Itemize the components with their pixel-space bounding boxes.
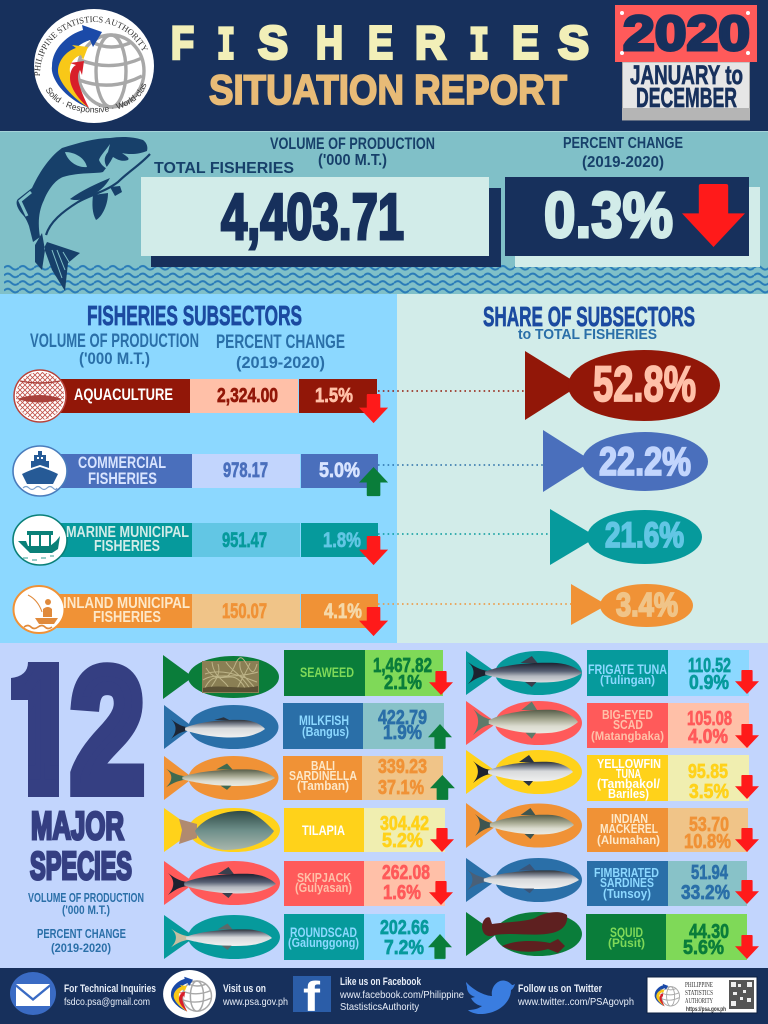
row: aquaculture: 1.5% — [315, 385, 353, 407]
row: inland municipal fisheries: 150.07 — [222, 600, 267, 623]
species: frigate tuna: FRIGATE TUNA — [588, 661, 667, 677]
logo: Philippine Statistics Authority: PHILIPPINE STATISTICS AUTHORITY — [34, 16, 148, 76]
row: commercial fisheries: 5.0% — [319, 459, 360, 482]
contact: twitter: Follow us on Twitter — [518, 983, 603, 995]
row: inland municipal fisheries: INLAND MUNICIPAL — [63, 595, 190, 612]
icon: municipal boat — [13, 515, 67, 565]
badge: PSA with QR code: PHILIPPINE — [685, 980, 713, 989]
legend: volume and percent: ('000 M.T.) — [62, 905, 110, 917]
species: frigate tuna — [466, 650, 759, 696]
fish: marine municipal share — [550, 509, 702, 565]
fish: inland municipal share: 3.4% — [616, 586, 678, 623]
big numeral 12: 2 — [71, 633, 144, 827]
panel: total fisheries — [0, 131, 768, 294]
row: commercial fisheries: 978.17 — [223, 459, 268, 482]
species: skipjack: (Gulyasan) — [295, 880, 352, 895]
percent change card: 0.3% — [544, 179, 673, 251]
icon: facebook: f — [303, 973, 321, 1020]
heading: major species: MAJOR — [31, 805, 124, 848]
waves — [4, 264, 768, 294]
fish: commercial share: 22.2% — [599, 440, 691, 484]
row: commercial fisheries: COMMERCIAL — [78, 453, 166, 472]
badge: PSA with QR code: AUTHORITY — [685, 996, 713, 1005]
badge: date period — [615, 5, 757, 120]
big numeral 12: 1 — [22, 633, 60, 827]
species: squid: (Pusit) — [608, 936, 645, 950]
row: commercial fisheries: FISHERIES — [88, 469, 157, 488]
fish: aquaculture share: 52.8% — [593, 356, 696, 412]
title: FISHERIES — [171, 16, 589, 72]
species: indian mackerel: 10.8% — [684, 831, 731, 853]
heading: major species: SPECIES — [30, 845, 132, 888]
species: milkfish: (Bangus) — [302, 724, 349, 739]
icon: twitter bird — [466, 980, 515, 1014]
fish: inland municipal share — [571, 584, 693, 627]
percent change card — [505, 177, 760, 267]
row: marine municipal fisheries — [13, 515, 388, 565]
panel: 12 major species — [0, 633, 768, 968]
species: indian mackerel: 53.70 — [689, 814, 729, 836]
species: skipjack: 262.08 — [382, 862, 430, 884]
contact: facebook: StastisticsAuthority — [340, 1001, 420, 1013]
species: squid — [466, 912, 759, 960]
species: yellowfin tuna: 3.5% — [689, 781, 729, 803]
row: marine municipal fisheries: FISHERIES — [94, 538, 160, 555]
species: bali sardinella: SARDINELLA — [289, 768, 357, 783]
heading: percent change: (2019-2020) — [582, 154, 664, 171]
species: fimbriated sardines: FIMBRIATED — [594, 865, 659, 880]
species: roundscad: 7.2% — [384, 937, 424, 959]
row: aquaculture: 2,324.00 — [217, 385, 278, 407]
icon: commercial ship — [13, 446, 67, 496]
species: seaweed — [163, 650, 453, 699]
heading: percent change: PERCENT CHANGE — [563, 135, 683, 152]
species: big-eyed scad: (Matangbaka) — [591, 729, 664, 743]
heading: major species — [30, 805, 132, 888]
species: roundscad — [164, 914, 452, 960]
column heading: volume: ('000 M.T.) — [79, 349, 150, 368]
species: squid: 5.6% — [683, 937, 724, 959]
species: indian mackerel: MACKEREL — [600, 821, 658, 836]
species: bali sardinella: 37.1% — [378, 777, 424, 799]
subtitle: SITUATION REPORT: SITUATION REPORT — [209, 66, 567, 113]
heading: total fisheries: TOTAL FISHERIES — [154, 160, 294, 177]
species: milkfish: MILKFISH — [299, 712, 349, 728]
total volume card: 4,403.71 — [221, 180, 404, 253]
title: FISHERIES: F — [171, 16, 194, 68]
badge: date period: 2020 — [623, 7, 750, 61]
contact: technical inquiries — [64, 983, 156, 1008]
species: fimbriated sardines: 51.94 — [691, 862, 729, 884]
species: yellowfin tuna: Bariles) — [608, 786, 649, 801]
species: frigate tuna: 0.9% — [689, 672, 729, 694]
row: commercial fisheries — [13, 446, 388, 496]
legend: volume and percent: VOLUME OF PRODUCTION — [28, 891, 144, 905]
fish: commercial share — [543, 430, 708, 492]
species: roundscad: 202.66 — [380, 917, 429, 939]
icon: fishing net — [14, 370, 66, 422]
contact: website — [222, 983, 288, 1008]
species: indian mackerel — [466, 803, 759, 853]
species: fimbriated sardines: 33.2% — [681, 882, 730, 904]
title: FISHERIES: S — [558, 16, 589, 68]
contact: technical inquiries: For Technical Inquiries — [64, 983, 156, 995]
species: squid: SQUID — [610, 924, 643, 940]
species: roundscad: ROUNDSCAD — [290, 924, 357, 940]
column heading: percent change: PERCENT CHANGE — [216, 332, 345, 353]
header band — [0, 0, 768, 131]
title: FISHERIES: I — [217, 20, 235, 72]
species: tilapia: 5.2% — [382, 830, 423, 852]
QR code — [729, 980, 754, 1009]
row: inland municipal fisheries — [14, 586, 388, 636]
species: big-eyed scad: 4.0% — [688, 726, 728, 748]
badge: PSA with QR code — [647, 977, 757, 1013]
icon: envelope — [10, 972, 56, 1015]
row: inland municipal fisheries: FISHERIES — [93, 609, 161, 626]
badge: PSA with QR code: STATISTICS — [685, 988, 713, 997]
title: FISHERIES: R — [415, 16, 446, 68]
species: fimbriated sardines: (Tunsoy) — [603, 886, 651, 901]
column heading: volume — [30, 331, 199, 368]
species: roundscad: (Galunggong) — [288, 935, 359, 950]
species: milkfish: 422.79 — [378, 707, 427, 729]
panel: fisheries subsectors — [0, 294, 397, 643]
species: yellowfin tuna: 95.85 — [688, 761, 728, 783]
heading: volume of production: ('000 M.T.) — [318, 152, 387, 169]
contact: facebook: www.facebook.com/Philippine — [339, 989, 464, 1001]
species: bali sardinella: (Tamban) — [297, 778, 349, 793]
species: tilapia — [164, 808, 454, 852]
heading: fisheries subsectors: FISHERIES SUBSECTORS — [87, 300, 302, 331]
contact: facebook: Like us on Facebook — [340, 976, 422, 988]
heading: volume of production: VOLUME OF PRODUCTION — [270, 134, 435, 153]
species: tilapia: TILAPIA — [302, 822, 345, 838]
species: big-eyed scad: 105.08 — [687, 708, 732, 730]
logo: Philippine Statistics Authority — [34, 9, 154, 123]
species: yellowfin tuna — [466, 750, 759, 803]
species: seaweed: 1,467.82 — [373, 655, 432, 677]
species: yellowfin tuna: (Tambakol/ — [597, 776, 660, 791]
species: tilapia: 304.42 — [380, 813, 429, 835]
logo: Philippine Statistics Authority: Solid · Responsive · World-class — [46, 84, 146, 114]
column heading: volume: VOLUME OF PRODUCTION — [30, 331, 199, 352]
connectors — [378, 391, 571, 604]
row: marine municipal fisheries: 951.47 — [222, 529, 267, 552]
species: fimbriated sardines — [466, 858, 759, 906]
heading: volume of production — [270, 134, 435, 169]
title: FISHERIES: E — [512, 16, 539, 68]
title: FISHERIES: H — [316, 16, 343, 68]
row: inland municipal fisheries: 4.1% — [324, 600, 362, 623]
species: skipjack — [164, 861, 453, 906]
arrow: down — [682, 184, 745, 247]
column heading: percent change: (2019-2020) — [236, 353, 325, 372]
icon: angler in boat — [14, 586, 64, 633]
badge: PSA with QR code: https://psa.gov.ph — [686, 1007, 726, 1013]
species: yellowfin tuna: YELLOWFIN — [597, 756, 661, 771]
icon: leaping fish — [17, 137, 150, 291]
contact: twitter — [517, 983, 634, 1008]
icon: facebook — [293, 973, 331, 1020]
row: marine municipal fisheries: 1.8% — [323, 529, 361, 552]
species: bali sardinella: BALI — [311, 758, 335, 773]
footer band — [0, 968, 768, 1024]
big numeral 12 — [11, 662, 144, 797]
contact: technical inquiries: fsdco.psa@gmail.com — [64, 996, 150, 1008]
species: frigate tuna: 110.52 — [688, 655, 731, 677]
row: aquaculture — [14, 370, 388, 423]
panel: share of subsectors — [378, 294, 768, 643]
title: FISHERIES: E — [368, 16, 393, 68]
row: aquaculture: AQUACULTURE — [74, 385, 173, 404]
species: bali sardinella: 339.23 — [378, 756, 427, 778]
fish: marine municipal share: 21.6% — [605, 516, 684, 555]
row: marine municipal fisheries: MARINE MUNICIPAL — [66, 524, 189, 541]
species: big-eyed scad: BIG-EYED — [602, 707, 653, 722]
title: FISHERIES: I — [469, 20, 489, 72]
species: skipjack: SKIPJACK — [297, 870, 351, 885]
species: indian mackerel: (Alumahan) — [597, 833, 660, 847]
species: skipjack: 1.6% — [383, 882, 421, 904]
legend: volume and percent — [28, 891, 144, 955]
species: bali sardinella — [164, 756, 455, 800]
arrow: down — [359, 536, 388, 565]
species: squid: 44.30 — [689, 921, 729, 943]
species: milkfish — [164, 703, 452, 749]
legend: volume and percent: PERCENT CHANGE — [37, 927, 126, 941]
species: big-eyed scad: SCAD — [613, 717, 643, 732]
species: milkfish: 1.9% — [383, 722, 422, 744]
column heading: percent change — [216, 332, 345, 372]
species: yellowfin tuna: TUNA — [616, 766, 641, 781]
species: seaweed: SEAWEED — [300, 664, 354, 680]
species: big-eyed scad — [466, 701, 759, 748]
species: indian mackerel: INDIAN — [611, 811, 648, 826]
arrow: down — [359, 394, 388, 423]
contact: website: Visit us on — [223, 983, 266, 995]
species: seaweed: 2.1% — [384, 672, 422, 694]
total volume card — [141, 177, 501, 267]
contact: website: www.psa.gov.ph — [222, 996, 288, 1008]
fish: aquaculture share — [525, 350, 720, 421]
species: fimbriated sardines: SARDINES — [600, 875, 654, 890]
heading: percent change — [563, 135, 683, 171]
subheading: to TOTAL FISHERIES — [518, 326, 657, 343]
arrow: down — [359, 607, 388, 636]
title: FISHERIES: S — [258, 16, 288, 68]
logo: small PSA seal — [163, 970, 216, 1018]
species: frigate tuna: (Tulingan) — [600, 673, 655, 687]
contact: facebook — [339, 976, 464, 1013]
legend: volume and percent: (2019-2020) — [51, 943, 111, 955]
contact: twitter: www.twitter..com/PSAgovph — [517, 996, 634, 1008]
arrow: up — [359, 467, 388, 496]
